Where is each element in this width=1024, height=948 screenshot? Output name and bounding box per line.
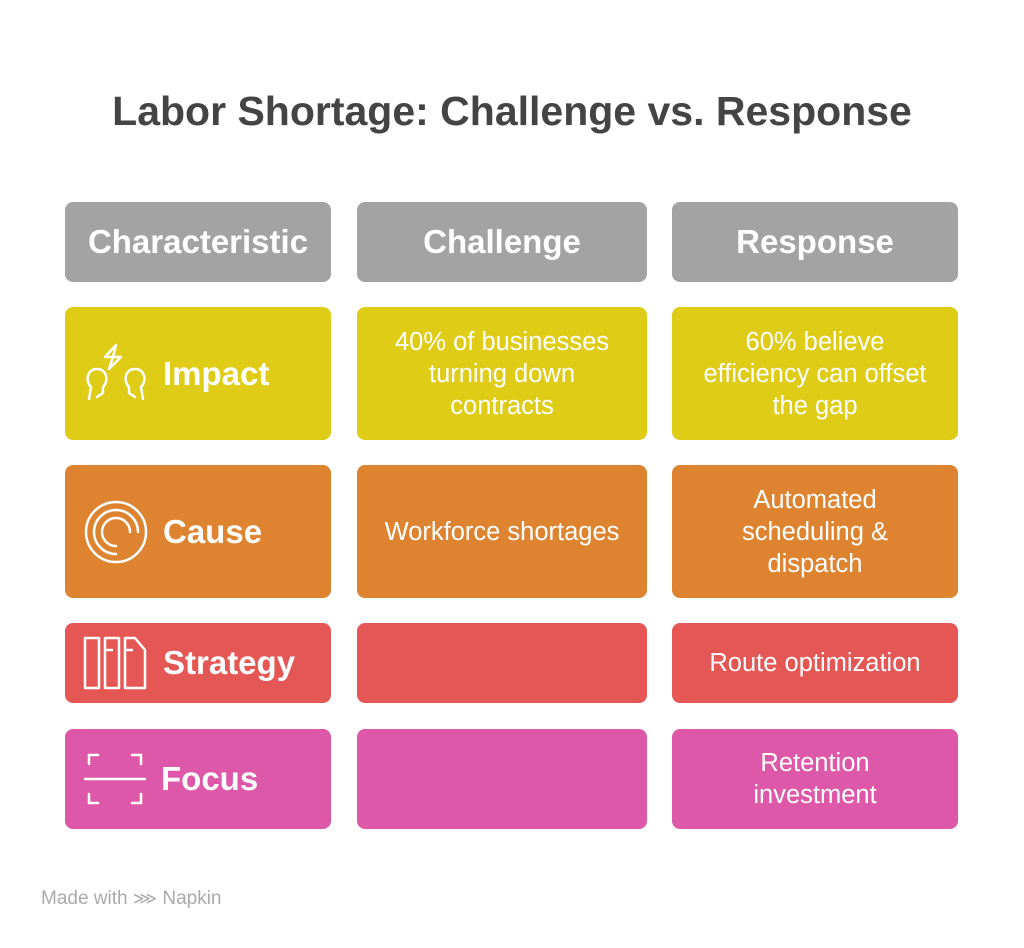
icon: concentric circles xyxy=(84,500,148,564)
response: strategy xyxy=(672,623,958,703)
response: impact: efficiency can offset xyxy=(703,360,927,388)
icon: people with lightning xyxy=(86,344,146,400)
header: response xyxy=(672,202,958,282)
response: cause xyxy=(672,465,958,598)
header: characteristic xyxy=(65,202,331,282)
row label: focus xyxy=(65,729,331,829)
challenge: cause: Workforce shortages xyxy=(385,518,619,546)
icon: scan frame xyxy=(84,754,146,804)
response: focus: investment xyxy=(753,781,877,809)
response: focus: Retention xyxy=(760,749,870,777)
response: impact: 60% believe xyxy=(746,328,884,356)
row label: cause xyxy=(65,465,331,598)
challenge: impact: turning down xyxy=(429,360,575,388)
header: challenge xyxy=(357,202,647,282)
challenge: focus (empty) xyxy=(357,729,647,829)
response: cause: Automated xyxy=(753,486,877,514)
challenge: impact xyxy=(357,307,647,440)
icon: books xyxy=(84,636,146,690)
response: strategy: Route optimization xyxy=(709,649,921,677)
row label: focus: Focus xyxy=(161,760,258,797)
row label: strategy xyxy=(65,623,331,703)
challenge: impact: contracts xyxy=(450,392,554,420)
header: challenge: Challenge xyxy=(423,223,581,260)
footer: made with napkin: Made with ⋙ Napkin xyxy=(41,888,221,909)
challenge: cause xyxy=(357,465,647,598)
row label: cause: Cause xyxy=(163,512,262,550)
response: focus xyxy=(672,729,958,829)
response: impact: the gap xyxy=(772,392,858,420)
response: cause: dispatch xyxy=(768,550,862,578)
row label: impact: Impact xyxy=(163,354,269,392)
row label: impact xyxy=(65,307,331,440)
header: response: Response xyxy=(736,223,894,260)
title: Labor Shortage: Challenge vs. Response xyxy=(112,88,912,134)
challenge: strategy (empty) xyxy=(357,623,647,703)
response: cause: scheduling & xyxy=(742,518,888,546)
challenge: impact: 40% of businesses xyxy=(395,328,609,356)
response: impact xyxy=(672,307,958,440)
row label: strategy: Strategy xyxy=(163,644,295,681)
header: characteristic: Characteristic xyxy=(88,223,308,260)
